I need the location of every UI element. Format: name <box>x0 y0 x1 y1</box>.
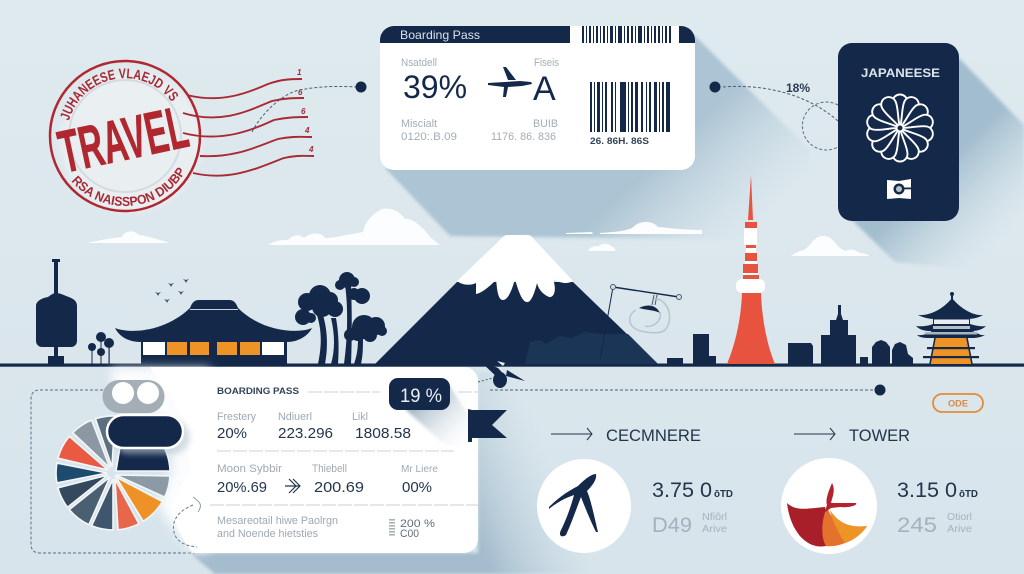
icon: passport chip <box>887 179 911 199</box>
arrow <box>794 428 835 440</box>
value: 3.15 0 <box>897 479 957 502</box>
boarding pass lower card: Likl <box>352 411 368 423</box>
secondary value: 245 <box>897 514 937 537</box>
tag ODE: ODE <box>948 398 968 408</box>
icon: red fan <box>787 483 867 547</box>
hanging bird icon <box>480 361 525 388</box>
dashed circle <box>802 102 838 150</box>
boarding pass top: 1176. 86. 836 <box>491 131 556 143</box>
secondary label: Nfiôrl <box>702 512 727 523</box>
boarding pass lower card: Ndiuerl <box>278 411 312 423</box>
header bar <box>380 26 570 43</box>
clouds <box>87 209 870 256</box>
stamp rings <box>50 61 200 211</box>
row 2 labels: Moon Sybbir <box>217 463 282 475</box>
boarding pass top: 0120:.B.09 <box>401 131 457 143</box>
card body <box>380 26 695 170</box>
postage stamp <box>48 60 314 212</box>
passport <box>838 43 959 221</box>
stamp line marks: 4 <box>304 126 310 135</box>
stamp line marks: 6 <box>298 88 303 97</box>
icon: lantern tower <box>36 259 77 364</box>
boarding pass lower card: 00% <box>402 479 432 496</box>
passport connector and 18 percent <box>710 81 838 150</box>
stamp line marks: 4 <box>308 145 314 154</box>
field label right: Fiseis <box>534 57 559 69</box>
boarding pass lower card: Thiebell <box>312 463 347 475</box>
icon: plane <box>549 474 598 536</box>
pagoda <box>916 292 986 364</box>
heading rule <box>308 391 478 393</box>
stamp word TRAVEL: TRAVEL <box>53 93 194 186</box>
white card glow <box>112 368 210 552</box>
dashed connector from stamp <box>252 82 366 132</box>
gray ring <box>102 380 164 413</box>
value: 3.75 0 <box>652 479 712 502</box>
boarding pass lower card: 223.296 <box>278 425 333 442</box>
navy pill <box>107 415 183 448</box>
Mount Fuji <box>375 235 658 364</box>
boarding pass lower card: 1808.58 <box>355 425 411 442</box>
field label left: Nsatdell <box>401 57 437 69</box>
stamp bottom text: RSA NAISSPON DIUBP <box>72 168 182 206</box>
mid buildings <box>667 334 716 364</box>
row 1 values: 20% <box>217 425 247 442</box>
ground line <box>0 364 1024 367</box>
snow cap <box>457 235 573 302</box>
row 1 labels: Frestery <box>217 411 256 423</box>
lower field left: Miscialt <box>401 118 437 130</box>
pine trees <box>295 272 387 364</box>
mountain body <box>375 282 658 364</box>
row divider <box>217 450 454 452</box>
boarding pass lower card: C00 <box>400 528 419 540</box>
icon circle <box>781 458 877 554</box>
lower field right: BUIB <box>533 118 558 130</box>
boarding pass lower card: and Noende hietsties <box>217 528 318 540</box>
icon: flag <box>468 409 507 442</box>
city buildings <box>788 305 913 364</box>
heading: CECMNERE <box>606 426 701 445</box>
row divider <box>210 504 478 506</box>
arrow <box>551 428 592 440</box>
dashed connector lower <box>478 378 886 396</box>
stamp top text: JUHANEESE VLAEJD VS <box>60 68 178 120</box>
passport title: JAPANEESE <box>861 66 940 80</box>
badge 19 percent: 19 % <box>400 386 442 407</box>
icon: binder clip <box>102 380 190 454</box>
small curve icon <box>173 497 200 547</box>
birds <box>155 279 189 303</box>
column: Cecmnere: Arive <box>702 524 727 535</box>
bottom card shadow <box>190 372 590 574</box>
small bar icon <box>389 519 395 536</box>
icon: arrow <box>285 479 300 493</box>
passport cover <box>838 43 959 221</box>
column: Tower <box>781 426 978 554</box>
column: Cecmnere <box>537 426 733 553</box>
stamp disc shadow <box>61 72 201 212</box>
column: Cecmnere: ōTD <box>714 489 733 500</box>
secondary label: Otiorl <box>947 512 972 523</box>
stamp line marks: 6 <box>301 107 306 116</box>
dashed frame <box>31 390 195 553</box>
skyline <box>0 175 1024 367</box>
barcode number: 26. 86H. 86S <box>590 136 649 146</box>
value 39%: 39% <box>403 69 467 105</box>
badge 19 percent <box>389 378 450 410</box>
temple windows <box>143 342 165 355</box>
pie chart <box>56 416 170 530</box>
temple <box>115 300 312 365</box>
header title: Boarding Pass <box>400 28 480 42</box>
icon: chrysanthemum crest <box>866 94 934 162</box>
passport shadow <box>850 58 1024 275</box>
value 18%: 18% <box>786 81 810 95</box>
row 2 values: 20%.69 <box>217 479 267 496</box>
Tokyo Tower <box>727 175 775 364</box>
icon circle <box>537 459 631 553</box>
wavy cancellation lines <box>183 79 314 176</box>
header barcode <box>582 26 671 43</box>
boarding pass lower card: 200.69 <box>314 479 364 496</box>
card heading: BOARDING PASS <box>217 386 299 396</box>
boarding pass top <box>380 26 695 170</box>
footer note: Mesareotail hiwe Paolrgn <box>217 515 338 527</box>
column: Tower: Arive <box>947 524 972 535</box>
icon: plane <box>488 67 532 97</box>
boarding pass shadow <box>385 36 810 240</box>
temple roof <box>115 300 312 342</box>
badge shadow <box>405 385 478 450</box>
tag ODE <box>933 394 983 412</box>
boarding pass lower card: Mr Liere <box>401 464 438 475</box>
crane lamp <box>600 284 682 360</box>
gate A: A <box>533 70 556 108</box>
stamp line marks: 1 <box>297 68 302 77</box>
clip soft shadow <box>112 420 190 454</box>
temple hall <box>141 340 287 365</box>
boarding pass lower card <box>150 367 478 553</box>
heading: TOWER <box>849 426 910 445</box>
footer values: 200 % <box>400 518 435 530</box>
stamp line marks <box>297 68 314 154</box>
card body <box>150 367 478 553</box>
small palms <box>88 332 114 364</box>
column: Tower: ōTD <box>959 489 978 500</box>
main barcode <box>590 82 670 132</box>
secondary value: D49 <box>652 514 692 537</box>
